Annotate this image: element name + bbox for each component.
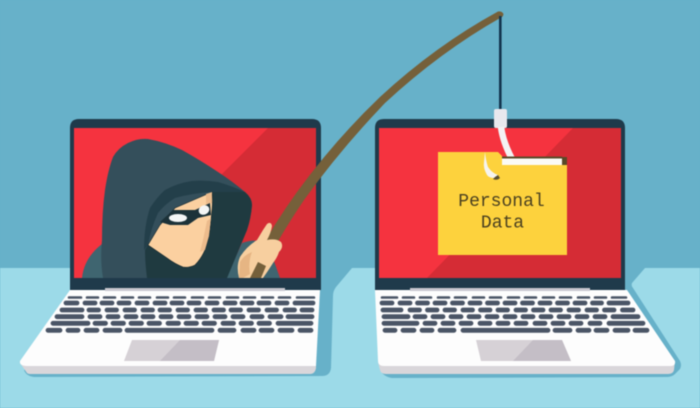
folder (438, 152, 567, 255)
folder body (438, 152, 567, 255)
face shading (200, 192, 212, 252)
mask (160, 203, 211, 225)
folder label line 1: Personal (458, 192, 545, 212)
left trackpad (124, 340, 219, 361)
left keyboard (48, 298, 314, 330)
background desk (0, 268, 700, 408)
rod end below fist (250, 262, 266, 278)
shoulders (82, 241, 280, 278)
right base lip (378, 361, 675, 374)
right laptop lid (375, 119, 625, 290)
palm shading (239, 252, 252, 278)
face (148, 192, 212, 267)
fishing rod (246, 11, 504, 278)
hood (101, 139, 252, 278)
hacker (82, 139, 280, 278)
hood fold band (144, 181, 245, 250)
hood interior (145, 192, 252, 278)
left hinge (105, 288, 285, 291)
left base top (20, 290, 320, 366)
eye left (169, 214, 187, 222)
fishing line (499, 16, 502, 110)
hook swivel (494, 109, 507, 128)
right base top (375, 290, 675, 366)
hacker hand (238, 223, 282, 278)
eye right (197, 204, 211, 216)
right keyboard (382, 298, 647, 330)
left laptop lid (70, 119, 321, 290)
folder paper (502, 158, 562, 165)
hook shadow (493, 175, 500, 180)
right trackpad (476, 340, 571, 361)
left laptop shadow (24, 268, 352, 377)
left screen (74, 128, 316, 278)
background wall (0, 0, 700, 268)
hook point (484, 152, 498, 178)
left laptop (70, 119, 321, 290)
right laptop base (375, 288, 675, 374)
left base lip (20, 360, 316, 374)
right laptop (375, 119, 625, 290)
folder label line 2: Data (481, 214, 524, 234)
left laptop base (20, 288, 320, 374)
folder paper edge (502, 156, 567, 165)
right laptop shadow (380, 268, 681, 378)
right screen (379, 128, 621, 278)
palm and fingers (238, 223, 282, 278)
hook shank (501, 127, 512, 159)
right hinge (410, 288, 590, 291)
